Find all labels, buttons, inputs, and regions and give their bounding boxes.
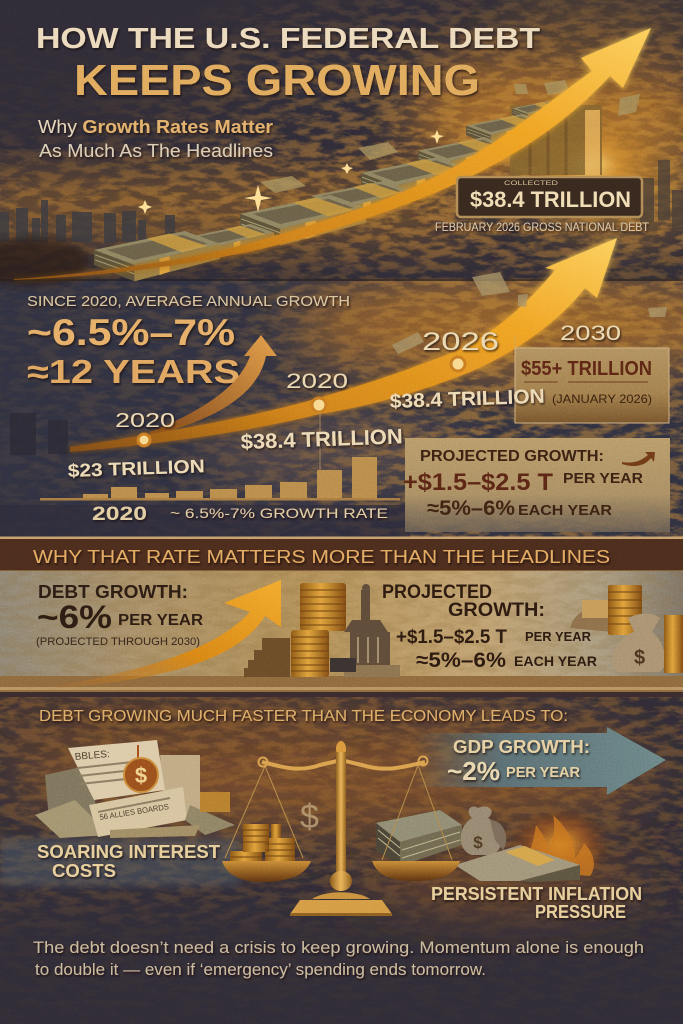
panel: projected growth (403, 438, 670, 532)
arrow: main debt arrow (14, 28, 651, 280)
subtitle: As Much As The Headlines (39, 140, 273, 161)
labels: timeline values: $38.4 TRILLION (389, 386, 545, 413)
labels: timeline values (67, 386, 545, 481)
panel: projected growth: EACH YEAR (518, 503, 613, 519)
subtitle: Why Growth Rates Matter (38, 116, 273, 137)
arrow: GDP growth (414, 727, 666, 795)
text: debt growth rate: DEBT GROWTH: (38, 582, 188, 602)
icon: bills and documents: BBLES: (74, 749, 110, 763)
label: soaring interest costs: SOARING INTEREST (37, 842, 220, 862)
icon: dollar medal: $ (135, 763, 147, 788)
text: closing statement: The debt doesn’t need a crisis to keep growing. Momentum alone is enough (33, 938, 644, 957)
icon: building behind stacks (510, 105, 602, 175)
callout: current debt plaque: COLLECTED (504, 181, 559, 187)
callout: 2030 projection (515, 348, 669, 423)
label: chart axis: ~ 6.5%-7% GROWTH RATE (170, 505, 388, 521)
labels: timeline years: 2026 (422, 328, 499, 356)
icon: skyline right (640, 160, 683, 230)
arrow: GDP growth: GDP GROWTH: (453, 736, 590, 757)
text: projected growth: PER YEAR (525, 629, 592, 644)
panel: debt growth comparison (0, 571, 683, 697)
labels: timeline values: $23 TRILLION (67, 455, 205, 481)
icon: books stack (244, 638, 290, 677)
text: projected growth: ≈5%–6% (416, 649, 506, 672)
icon: bills (392, 272, 667, 354)
heading: average annual growth (27, 293, 350, 390)
arrow: timeline arrow (70, 238, 617, 452)
icon: bills and documents: 56 ALLIES BOARDS (99, 802, 169, 822)
text: closing statement (33, 938, 644, 979)
text: debt growth rate (36, 582, 203, 648)
label: soaring interest costs (37, 842, 220, 881)
panel: projected growth: ≈5%–6% (427, 497, 515, 520)
callout: 2030 projection: $55+ TRILLION (521, 358, 652, 380)
labels: timeline years: 2020 (115, 410, 175, 432)
text: projected growth: PROJECTED (382, 582, 492, 603)
arrow: growth (57, 580, 281, 688)
label: chart axis: 2020 (92, 504, 147, 525)
label: chart axis (92, 504, 388, 525)
text: debt growth rate: (PROJECTED THROUGH 2030) (36, 636, 200, 648)
labels: timeline years: 2020 (286, 370, 348, 393)
label: persistent inflation pressure: PERSISTENT INFLATION (431, 884, 642, 904)
icon: money bags and coins (570, 585, 683, 673)
heading: WHY THAT RATE MATTERS MORE THAN THE HEADLINES (33, 547, 610, 567)
icon: balance scale (222, 741, 460, 916)
icon: monument (330, 584, 400, 677)
labels: timeline values: $38.4 TRILLION (240, 425, 403, 454)
icon: cash and bag right: $ (473, 833, 483, 852)
label: soaring interest costs: COSTS (52, 861, 116, 881)
arrow: GDP growth: ~2% (447, 756, 500, 786)
labels: timeline years (115, 322, 621, 432)
icon: sparkles (138, 130, 444, 214)
glow behind building (515, 115, 665, 215)
label: January 2026: (JANUARY 2026) (552, 392, 652, 406)
panel: hero header with rising debt arrow (0, 23, 683, 286)
text: projected growth: EACH YEAR (514, 653, 597, 669)
foliage bottom left (0, 238, 90, 286)
text: projected growth: +$1.5–$2.5 T (396, 627, 507, 648)
arrow: GDP growth: PER YEAR (506, 765, 581, 781)
heading: average annual growth: SINCE 2020, AVERAGE ANNUAL GROWTH (27, 293, 350, 310)
label: persistent inflation pressure: PRESSURE (535, 902, 626, 922)
icon: money stacks staircase (94, 101, 562, 281)
title: HOW THE U.S. FEDERAL DEBT (36, 23, 540, 55)
icon: cash and bag right (376, 807, 580, 882)
icon: floating bills (260, 80, 640, 193)
panel: debt versus economy (0, 708, 666, 979)
icon: gold coin stacks (291, 583, 346, 677)
callout: current debt plaque (457, 177, 642, 217)
icon: faded dollar signs: $ (300, 798, 319, 836)
heading: DEBT GROWING MUCH FASTER THAN THE ECONOMY LEADS TO: (39, 708, 568, 725)
caption: gross national debt: FEBRUARY 2026 GROSS NATIONAL DEBT (435, 222, 649, 234)
callout: current debt plaque: $38.4 TRILLION (470, 187, 631, 212)
text: projected growth: GROWTH: (448, 600, 545, 621)
text: closing statement: to double it — even if ‘emergency’ spending ends tomorrow. (35, 960, 486, 979)
icon: city skyline left (0, 200, 175, 243)
panel: projected growth: PROJECTED GROWTH: (420, 448, 604, 465)
title (36, 23, 540, 105)
heading: average annual growth: ~6.5%–7% (27, 312, 235, 353)
band behind interest label (0, 838, 240, 886)
bar chart: debt by year (40, 457, 400, 500)
icon: bills and documents (35, 740, 235, 838)
shelf (0, 676, 683, 696)
icon: money bags and coins: $ (634, 647, 645, 669)
label: persistent inflation pressure (431, 884, 642, 922)
arrow: small growth arrow (150, 335, 277, 436)
panel: why rate matters banner (0, 536, 683, 572)
panel: growth timeline (10, 238, 670, 532)
icon: skyline (10, 413, 68, 455)
title: KEEPS GROWING (74, 56, 480, 105)
labels: timeline years: 2030 (560, 322, 621, 345)
timeline markers (138, 357, 465, 446)
panel: projected growth: PER YEAR (563, 471, 644, 487)
icon: dollar medal (124, 745, 158, 792)
timeline guide lines (320, 335, 515, 470)
heading: average annual growth: ≈12 YEARS (27, 353, 240, 390)
panel: projected growth: +$1.5–$2.5 T (403, 469, 553, 496)
text: projected growth (382, 582, 597, 672)
icon: flames (508, 807, 612, 883)
icon: small up arrow (622, 452, 655, 466)
text: debt growth rate: PER YEAR (118, 612, 203, 629)
subtitle (38, 116, 273, 161)
text: debt growth rate: ~6% (37, 599, 112, 635)
